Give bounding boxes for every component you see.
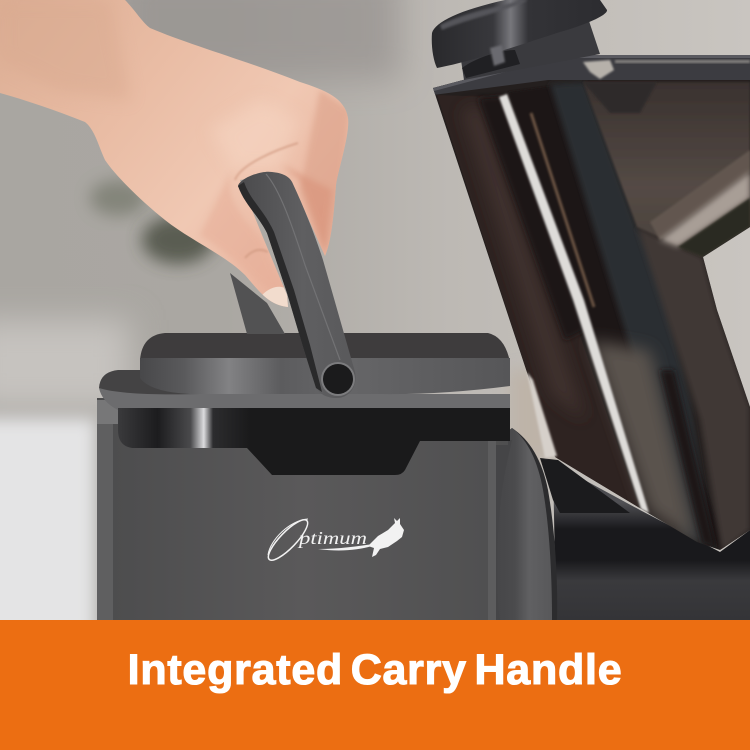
carry handle (238, 172, 356, 398)
hand (0, 0, 350, 308)
banner (0, 620, 750, 750)
lid (99, 333, 510, 410)
Optimum logo: ptimum (296, 528, 367, 548)
chute reflection line (499, 94, 649, 513)
juicer chute and hopper (433, 55, 750, 552)
rear handle post (230, 273, 285, 334)
black trim band (118, 408, 510, 475)
juicer motor body (97, 398, 508, 620)
handle pivot (321, 362, 355, 396)
hopper lid knob (432, 0, 607, 80)
upper lid side band (140, 358, 510, 394)
motor disc (490, 428, 557, 620)
juicer base (553, 463, 750, 620)
black recess under chute (540, 458, 630, 513)
upper lid top surface (140, 333, 510, 362)
banner heading: Integrated Carry Handle (128, 646, 622, 694)
Optimum logo (263, 515, 404, 565)
